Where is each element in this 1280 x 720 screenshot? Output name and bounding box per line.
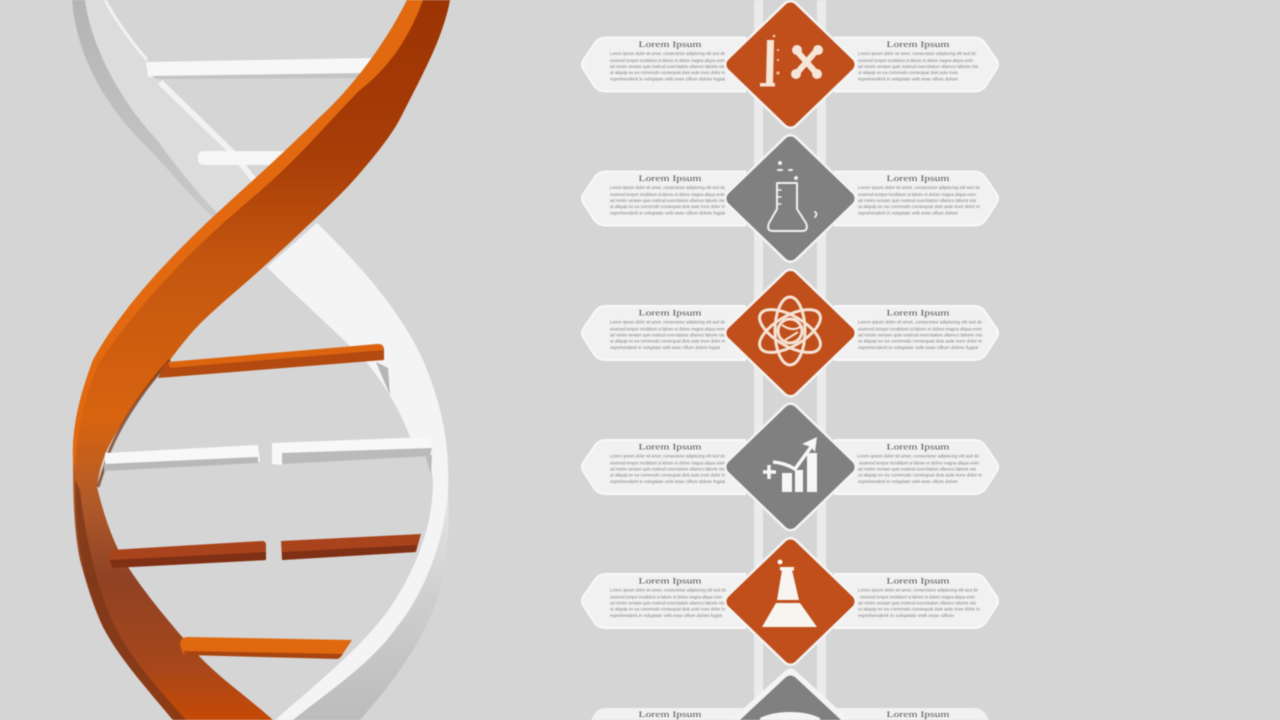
left callout 5: ut aliquip ex ea commodo consequat duis aute irure dolor in xyxy=(610,606,725,612)
left callout 3 xyxy=(582,306,745,360)
left callout 1: ut aliquip ex ea commodo consequat duis aute irure dolor in xyxy=(610,70,725,76)
left callout 5: eiusmod tempor incididunt ut labore et dolore magna aliqua enim xyxy=(610,594,722,600)
left callout 5 xyxy=(582,574,745,628)
back strand lower white xyxy=(267,223,449,720)
orange strand xyxy=(73,0,450,720)
left callout 2: ad minim veniam quis nostrud exercitation ullamco laboris nisi xyxy=(610,198,725,204)
right callout 4: reprehenderit in voluptate velit esse cillum dolore xyxy=(858,479,958,485)
left callout 4: Lorem ipsum dolor sit amet, consectetur adipiscing elit sed do xyxy=(610,454,725,460)
row 5 xyxy=(582,574,998,628)
right callout 2: reprehenderit in voluptate velit esse cillum dolore xyxy=(858,210,958,216)
right callout 5: eiusmod tempor incididunt ut labore et dolore magna aliqua enim xyxy=(860,594,975,600)
left callout 4: eiusmod tempor incididunt ut labore et dolore magna aliqua enim xyxy=(610,460,725,466)
white rung 1 xyxy=(146,58,372,79)
right callout 6: Lorem Ipsum xyxy=(886,709,950,719)
right callout 4: ad minim veniam quis nostrud exercitation ullamco laboris nisi xyxy=(858,466,976,472)
right callout 3: ad minim veniam quis nostrud exercitation ullamco laboris nisi xyxy=(858,332,982,338)
right callout 3: Lorem ipsum dolor sit amet, consectetur adipiscing elit sed do xyxy=(858,320,982,326)
left callout 5: Lorem ipsum dolor sit amet, consectetur adipiscing elit sed do xyxy=(610,588,726,594)
left callout 1: Lorem Ipsum xyxy=(638,39,702,49)
left callout 3: ad minim veniam quis nostrud exercitation ullamco laboris nisi xyxy=(610,332,725,338)
white rung left xyxy=(104,445,260,471)
icon: flask outline xyxy=(768,162,816,231)
right callout 4: Lorem Ipsum xyxy=(886,442,950,452)
left callout 2 xyxy=(582,172,745,226)
right callout 1: eiusmod tempor incididunt ut labore et dolore magna aliqua enim xyxy=(858,58,973,64)
right callout 3: eiusmod tempor incididunt ut labore et dolore magna aliqua enim xyxy=(858,326,982,332)
left callout 3: Lorem Ipsum xyxy=(638,308,702,318)
right callout 1: ut aliquip ex ea commodo consequat duis aute irure xyxy=(858,70,958,76)
right callout 5: ut aliquip ex ea commodo consequat duis aute irure dolor in xyxy=(858,606,980,612)
right callout 2: Lorem Ipsum xyxy=(886,173,950,183)
icon: cap top xyxy=(760,712,820,720)
left callout 4: Lorem Ipsum xyxy=(638,442,702,452)
diamond 2 with flask outline icon xyxy=(734,144,848,254)
left callout 2: Lorem Ipsum xyxy=(638,173,702,183)
right callout 5: ad minim veniam quis nostrud exercitation ullamco laboris nisi xyxy=(858,600,976,606)
left callout 4: ad minim veniam quis nostrud exercitation ullamco laboris nisi xyxy=(610,466,725,472)
row 1 xyxy=(582,38,998,92)
left callout 3: Lorem ipsum dolor sit amet, consectetur adipiscing elit sed do xyxy=(610,320,725,326)
right callout 4 xyxy=(835,440,998,494)
left callout 3: eiusmod tempor incididunt ut labore et dolore magna aliqua enim xyxy=(610,326,725,332)
left callout 1: ad minim veniam quis nostrud exercitation ullamco laboris nisi xyxy=(610,64,725,70)
left callout 6: Lorem Ipsum xyxy=(638,709,702,719)
icon: solid flask xyxy=(762,560,817,627)
diamond 5 with solid flask icon xyxy=(734,546,848,656)
icon: bar chart with arrow xyxy=(763,437,817,492)
right callout 5: Lorem Ipsum xyxy=(886,576,950,586)
right callout 4: eiusmod tempor incididunt ut labore et dolore magna aliqua enim xyxy=(859,460,979,466)
left callout 3: reprehenderit in voluptate velit esse cillum dolore fugiat xyxy=(610,345,721,351)
DNA helix xyxy=(72,0,450,720)
central rails xyxy=(754,0,826,720)
left callout 4 xyxy=(582,440,745,494)
right callout 1: reprehenderit in voluptate velit esse cillum dolore xyxy=(858,76,958,82)
white rung right xyxy=(272,437,432,465)
right callout 1: Lorem ipsum dolor sit amet, consectetur adipiscing elit sed do xyxy=(858,51,976,57)
right callout 3 xyxy=(835,306,998,360)
right callout 3: ut aliquip ex ea commodo consequat duis aute irure dolor in xyxy=(858,338,982,344)
left callout 3: ut aliquip ex ea commodo consequat duis aute irure dolor in xyxy=(610,338,725,344)
right callout 2: ad minim veniam quis nostrud exercitation ullamco laboris nisi xyxy=(858,198,976,204)
orange rung top xyxy=(158,344,384,378)
left callout 4: reprehenderit in voluptate velit esse cillum dolore fugiat xyxy=(610,479,726,485)
right callout 1: Lorem Ipsum xyxy=(886,39,950,49)
right callout 1 xyxy=(835,38,998,92)
icon: molecule cross xyxy=(791,45,823,79)
icon: test tube xyxy=(760,35,780,86)
right callout 2: eiusmod tempor incididunt ut labore et dolore magna aliqua enim xyxy=(858,192,976,198)
diamond 1 with tube and molecule icon xyxy=(734,10,848,120)
left callout 2: ut aliquip ex ea commodo consequat duis aute irure dolor in xyxy=(610,204,725,210)
row 2 xyxy=(582,172,998,226)
right callout 2: ut aliquip ex ea commodo consequat duis aute irure dolor in xyxy=(858,204,980,210)
right callout 1: ad minim veniam quis nostrud exercitation ullamco laboris nisi xyxy=(858,64,978,70)
row 4 xyxy=(582,440,998,494)
orange rung bottom xyxy=(180,637,352,659)
left callout 5: Lorem Ipsum xyxy=(638,576,702,586)
left callout 1: reprehenderit in voluptate velit esse cillum dolore fugiat xyxy=(610,76,726,82)
right callout 3: Lorem Ipsum xyxy=(886,308,950,318)
left callout 2: Lorem ipsum dolor sit amet, consectetur adipiscing elit sed do xyxy=(610,185,725,191)
left callout 5: ad minim veniam quis nostrud exercitation ullamco laboris nisi xyxy=(610,600,725,606)
icon: atom xyxy=(753,297,827,365)
right callout 2: Lorem ipsum dolor sit amet, consectetur adipiscing elit sed do xyxy=(858,185,980,191)
brown rung right xyxy=(281,534,421,560)
left callout 1 xyxy=(582,38,745,92)
left callout 1: eiusmod tempor incididunt ut labore et dolore magna aliqua enim xyxy=(610,58,725,64)
left callout 6 xyxy=(591,708,745,720)
left callout 2: reprehenderit in voluptate velit esse cillum dolore fugiat xyxy=(610,210,726,216)
brown rung left xyxy=(110,541,266,568)
right callout 4: ut aliquip ex ea commodo consequat duis aute irure dolor in xyxy=(858,472,982,478)
diamond 6 partial xyxy=(731,668,850,720)
right callout 4: Lorem ipsum dolor sit amet, consectetur adipiscing elit sed do xyxy=(857,454,979,460)
right callout 2 xyxy=(835,172,998,226)
right callout 5: Lorem ipsum dolor sit amet, consectetur adipiscing elit sed do xyxy=(858,588,978,594)
left callout 1: Lorem ipsum dolor sit amet, consectetur adipiscing elit sed do xyxy=(610,51,725,57)
row 3 xyxy=(582,306,998,360)
left callout 4: ut aliquip ex ea commodo consequat duis aute irure dolor in xyxy=(610,472,725,478)
right callout 3: reprehenderit in voluptate velit esse cillum dolore fugiat xyxy=(858,345,979,351)
right callout 5: reprehenderit in voluptate velit esse cillum xyxy=(858,613,954,619)
white rung 2 xyxy=(198,151,293,165)
diamond 3 with atom icon xyxy=(734,278,848,388)
left callout 2: eiusmod tempor incididunt ut labore et dolore magna aliqua enim xyxy=(610,192,725,198)
diamond 4 with chart icon xyxy=(734,412,848,522)
left callout 5: reprehenderit in voluptate velit esse cillum dolore fugiat xyxy=(610,613,723,619)
right callout 6 xyxy=(835,708,989,720)
right callout 5 xyxy=(835,574,998,628)
back strand upper xyxy=(72,0,262,217)
